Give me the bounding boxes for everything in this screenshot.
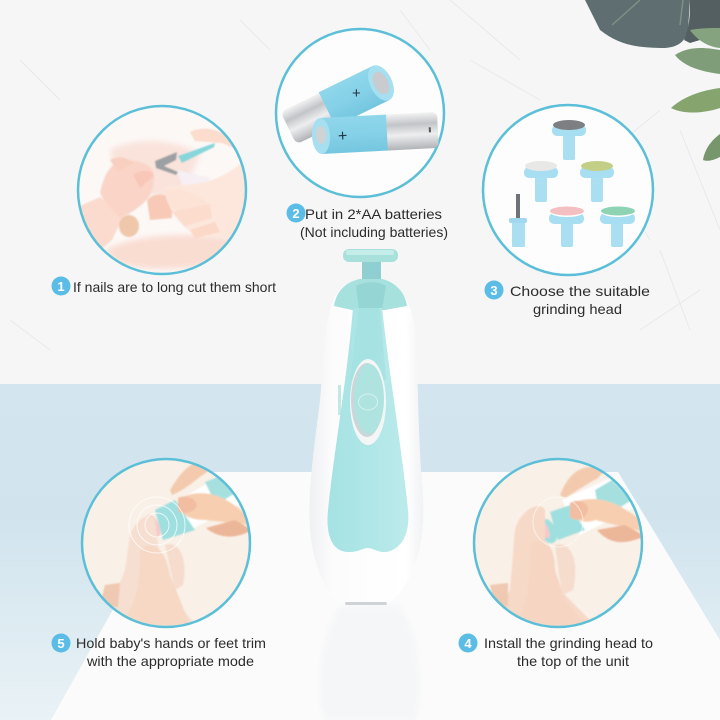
number badge 4: 4	[464, 636, 472, 651]
circle border	[474, 459, 642, 627]
caption 1: If nails are to long cut them short	[73, 279, 276, 295]
device base	[345, 602, 387, 605]
icon: back battery	[280, 61, 399, 145]
number badge 3: 3	[490, 283, 498, 298]
plus sign on back battery: +	[352, 85, 361, 102]
step 4: install grinding head	[458, 458, 653, 669]
circle border	[82, 459, 250, 627]
step 5: trimming with mode	[52, 458, 266, 669]
caption 3: Choose the suitable	[510, 283, 650, 299]
photo: cutting baby nails	[80, 128, 245, 271]
icon: front battery: +	[338, 128, 348, 145]
circle border	[78, 106, 246, 274]
number badge 1: 1	[57, 279, 65, 294]
caption 2: Put in 2*AA batteries	[305, 206, 442, 222]
central product: nail trimmer	[310, 249, 423, 605]
caption 5	[76, 635, 266, 669]
plant leaves	[585, 0, 720, 161]
number badge 5: 5	[57, 636, 65, 651]
number badge 5	[52, 634, 70, 652]
background: blue band	[0, 384, 720, 720]
device stem and head	[343, 249, 398, 284]
device side label	[338, 385, 341, 415]
step 1: cut nails	[52, 106, 276, 296]
number badge 4	[458, 634, 478, 652]
step 2: batteries	[276, 29, 448, 240]
background: white table	[51, 472, 720, 720]
photo: installing head	[473, 458, 645, 630]
device teal cap	[334, 279, 407, 310]
caption 4	[484, 635, 653, 669]
circle fill and border	[276, 29, 444, 197]
caption 3: grinding head	[533, 301, 622, 317]
device body	[309, 285, 423, 605]
caption 4: Install the grinding head to	[484, 635, 653, 651]
caption 3	[510, 283, 650, 317]
icon: front battery	[311, 112, 439, 154]
device teal panel	[328, 308, 408, 552]
circle fill and border	[483, 105, 653, 275]
caption 2: (Not including batteries)	[300, 224, 448, 240]
photo: holding baby hand	[80, 458, 252, 630]
caption 2	[300, 206, 448, 240]
number badge 3	[484, 280, 504, 300]
step 3: grinding heads	[483, 105, 653, 317]
device button	[350, 359, 386, 445]
background: marble wall	[0, 0, 720, 385]
caption 5: Hold baby's hands or feet trim	[76, 635, 266, 651]
device reflection	[320, 606, 420, 720]
icon: grinding heads set	[509, 120, 635, 247]
caption 4: the top of the unit	[517, 653, 629, 669]
number badge 2: 2	[292, 206, 300, 221]
number badge 1	[52, 276, 70, 296]
caption 5: with the appropriate mode	[86, 653, 254, 669]
number badge 2	[286, 204, 306, 222]
